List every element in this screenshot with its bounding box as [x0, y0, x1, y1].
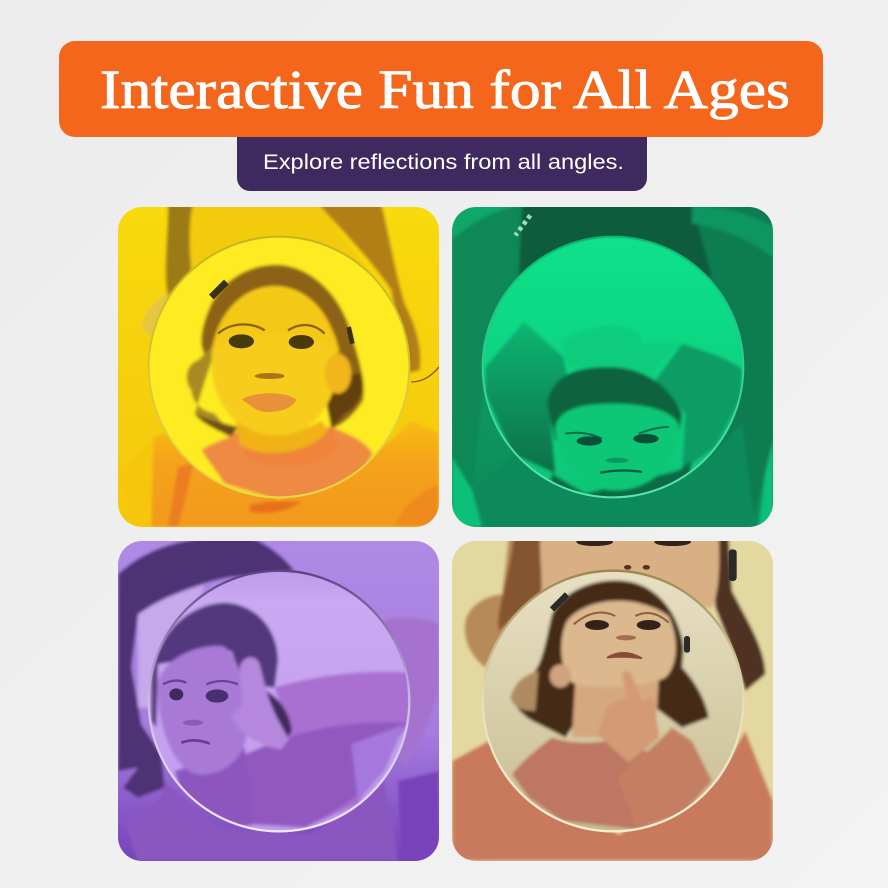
mirror rim natural — [483, 571, 743, 831]
title banner — [59, 41, 823, 137]
hair — [547, 367, 682, 440]
hand — [597, 671, 659, 763]
bottom sweater — [549, 460, 693, 496]
left arm — [485, 322, 567, 474]
panel: green mirror photo — [449, 204, 776, 530]
right arm — [655, 344, 742, 470]
subtitle banner — [237, 130, 647, 191]
title banner: Interactive Fun for All Ages — [100, 59, 790, 120]
eyes and mouth — [565, 427, 669, 473]
eyes and mouth — [552, 594, 690, 658]
outer face — [138, 584, 205, 708]
face — [211, 286, 338, 438]
eyes and mouth — [211, 282, 352, 412]
mirror rim yellow — [149, 237, 409, 497]
outer hair right — [712, 538, 765, 691]
subtitle banner: Explore reflections from all angles. — [263, 151, 624, 174]
hair — [514, 580, 709, 738]
outer sleeve — [385, 618, 439, 768]
outer shirt — [125, 781, 398, 861]
outer shirt — [452, 731, 773, 861]
hair — [201, 265, 364, 429]
outer eyes and nose — [576, 538, 737, 581]
hair clip reflection — [515, 215, 530, 235]
hair — [151, 603, 278, 728]
panel: purple mirror photo — [115, 538, 442, 864]
hand — [231, 657, 290, 749]
outer face — [539, 538, 719, 608]
hands — [566, 328, 672, 351]
outer hair left — [463, 541, 541, 668]
shirt — [201, 427, 373, 500]
neck — [572, 681, 659, 738]
mirror circle purple — [147, 569, 411, 833]
mirror circle green — [481, 235, 745, 507]
mirror rim green — [483, 237, 743, 497]
face — [555, 404, 679, 490]
mirror circle natural — [481, 569, 745, 833]
eyes and mouth — [163, 681, 238, 744]
face — [158, 646, 247, 774]
panel: natural mirror photo — [449, 538, 776, 864]
mirror circle yellow — [147, 235, 411, 500]
sweater — [511, 736, 648, 830]
collar — [175, 748, 255, 831]
mirror rim shadow yellow — [411, 367, 439, 382]
panel: yellow mirror photo — [115, 204, 442, 530]
mirror rim purple — [149, 571, 409, 831]
outer hair — [118, 538, 295, 798]
face — [561, 601, 676, 687]
arm — [274, 670, 408, 822]
